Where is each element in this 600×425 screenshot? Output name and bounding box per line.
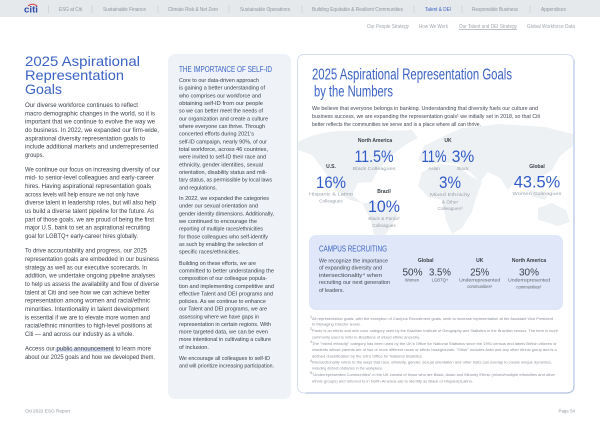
- text block: intro body copy: strategy as well as our executive scorecards. In: [25, 264, 148, 271]
- text block: intro body copy: To drive accountability and progress, our 2025: [25, 248, 148, 255]
- text block: footnotes: "Underrepresented Communities" in the UK consist of those who are Black, Asian and Minority Ethnic (mixed/multiple ethnicities and other: [312, 373, 556, 377]
- stat: Global 43.5%: 43.5%: [514, 174, 561, 192]
- top navigation bar: Appendices: [541, 7, 566, 13]
- text block: campus recruiting description: of expanding diversity and: [319, 266, 382, 272]
- text block: intro body copy: aspirational diversity representation goals to: [25, 135, 146, 142]
- sub navigation: How We Work: [419, 24, 448, 30]
- stat: Global 43.5%: Global: [529, 164, 545, 170]
- stat: campus global: LGBTQ+: [432, 278, 449, 282]
- text block: intro body copy: macro demographic changes in the world, so it is: [25, 110, 155, 117]
- text block: self-ID body copy: where everyone can thrive. Through: [178, 124, 265, 130]
- stat: North America 11.5%: North America: [358, 138, 392, 144]
- heading: 2025 Aspirational Representation Goals: 2025 Aspirational: [25, 53, 140, 69]
- top navigation bar: Building Equitable & Resilient Communities: [312, 7, 403, 13]
- text block: self-ID body copy: were invited to self-ID their race and: [178, 155, 266, 161]
- heading: by the numbers: 2025 Aspirational Representation Goals: [312, 66, 512, 84]
- text block: footnotes: 5: [310, 371, 312, 375]
- heading: by the numbers: [312, 66, 512, 100]
- top navigation bar: Sustainable Finance: [103, 7, 146, 13]
- text block: self-ID body copy: obtaining self-ID from our people: [179, 101, 263, 107]
- text block: self-ID body copy: under our sexual orientation and: [179, 204, 258, 210]
- panel: the importance of self-ID: [168, 54, 291, 399]
- text block: campus recruiting description: [319, 258, 390, 294]
- stat: Global 43.5%: Women Colleagues: [512, 191, 562, 196]
- text block: footnotes: including distinct obstacles in the workplace.: [312, 367, 383, 371]
- text block: self-ID body copy: our organization and create a culture: [179, 116, 268, 122]
- stat: U.S. 16%: U.S.: [326, 164, 336, 170]
- text block: self-ID body copy: and will prioritize increasing participation.: [179, 364, 274, 370]
- text block: self-ID body copy: for those colleagues who self-identify: [179, 234, 268, 240]
- text block: intro body copy: [25, 102, 160, 361]
- text block: self-ID body copy: tion and implementing competitive and: [179, 284, 274, 290]
- text block: intro body copy: part of those goals, we are proud of being the first: [25, 216, 154, 223]
- text block: self-ID body copy: In 2022, we expanded the categories: [179, 196, 269, 202]
- text block: footnotes: The "mixed ethnicity" category has been used by the UK's Office for National Statistics since the 1991 census and labels British citizens or: [312, 342, 558, 346]
- text block: self-ID body copy: ethnicity, gender identities, sexual: [179, 162, 263, 168]
- stat: UK 11% 3% 3%: UK: [444, 138, 452, 144]
- text block: campus recruiting description: of leaders.: [319, 288, 344, 294]
- text block: self-ID body copy: who comprises our workforce and: [178, 93, 261, 99]
- text block: intro body copy: racial/ethnic minorities to high-level positions at: [25, 323, 152, 330]
- stat: Brazil 10%: 10%: [368, 198, 400, 216]
- text block: self-ID body copy: policies. As we continue to enhance: [179, 299, 266, 305]
- text block: intro body copy: diverse talent in leadership roles, but will also help: [25, 200, 157, 207]
- stat: campus North America: 30%: [519, 268, 539, 278]
- top navigation bar: Climate Risk & Net Zero: [168, 7, 218, 13]
- text block: intro body copy: Citi — and across our industry as a whole.: [25, 331, 134, 338]
- stat: UK 11% 3% 3%: & Other: [442, 200, 459, 204]
- text block: self-ID body copy: specific races/ethnicities.: [179, 250, 240, 256]
- text block: self-ID body copy: and regulations.: [179, 185, 217, 191]
- footer: page number: Page 54: [558, 408, 575, 414]
- text block: intro body copy: Access our public announcement to learn more: [25, 346, 152, 353]
- stat: UK 11% 3% 3%: [422, 138, 475, 211]
- text block: footnotes: All representation goals, with the exception of Campus Recruitment goals, seek to increase representation at the Assistant Vice President: [312, 317, 553, 321]
- text block: intro body copy: minorities. Intentionality in talent development: [25, 306, 149, 313]
- stat: UK 11% 3% 3%: Colleagues³: [437, 206, 463, 211]
- text block: self-ID body copy: effective Talent and DEI programs and: [179, 291, 273, 297]
- text block: self-ID body copy: representation in certain regions. With: [179, 322, 271, 328]
- panel: campus recruiting: [309, 235, 563, 310]
- text block: intro body copy: major U.S. bank to set an aspirational recruiting: [25, 225, 151, 232]
- text block: intro body copy: across levels will help ensure we not only have: [25, 191, 139, 198]
- stat: U.S. 16%: 16%: [316, 174, 346, 192]
- stat: campus global: 3.5%: [429, 268, 451, 278]
- sub navigation: Global Workforce Data: [527, 24, 575, 30]
- text block: footnotes: [310, 315, 558, 383]
- stat: U.S. 16%: [309, 164, 353, 204]
- text block: footnotes: 3: [310, 340, 312, 344]
- text block: self-ID body copy: [178, 78, 274, 370]
- text block: self-ID body copy: more targeted data, we can be even: [179, 330, 268, 336]
- text block: intro body copy: hires. Having aspirational representation goals: [25, 183, 151, 190]
- sub navigation: [367, 24, 575, 30]
- stat: Brazil 10%: [368, 189, 400, 228]
- stat: UK 11% 3% 3%: Asian: [428, 166, 440, 171]
- text block: self-ID body copy: is gaining a better understanding of: [179, 86, 265, 92]
- text block: intro to numbers: better reflects the communities we serve and is a place where all can thrive.: [312, 122, 481, 128]
- sub navigation: Our People Strategy: [367, 24, 409, 30]
- text block: intro body copy: important that we continue to evolve the way we: [25, 119, 156, 126]
- stat: Global 43.5%: [512, 164, 562, 196]
- stat: U.S. 16%: Hispanic & Latino: [309, 192, 353, 197]
- text block: footnotes: to Managing Director levels.: [312, 323, 361, 327]
- text block: self-ID body copy: tary status, as permissible by local laws: [179, 178, 272, 184]
- top navigation bar: ESG at Citi: [59, 7, 82, 13]
- stat: campus North America: North America: [512, 258, 546, 264]
- text block: intro body copy: to help us assess the availability and flow of diverse: [25, 281, 160, 288]
- stat: campus UK: UK: [476, 258, 484, 264]
- text block: self-ID body copy: of inclusion.: [179, 345, 209, 351]
- text block: intro to numbers: business success, we are expanding the representation goals¹ we initially set in 2018, so that Citi: [312, 114, 540, 120]
- top navigation bar: [0, 0, 600, 17]
- text block: intro body copy: about our 2025 goals and how we developed them.: [25, 354, 155, 361]
- top navigation bar: Sustainable Operations: [240, 7, 290, 13]
- heading: the importance of self-ID: THE IMPORTANCE OF SELF-ID: [179, 64, 272, 74]
- text block: footnotes: Pardo is an ethnic and skin color category used by the Brazilian Institute of Geography and Statistics in the Brazilian census. The term is more: [312, 329, 558, 333]
- text block: intro body copy: do business. In 2022, we expanded our firm-wide,: [25, 127, 159, 134]
- stat: Brazil 10%: Brazil: [377, 189, 391, 195]
- icon: citi logo: citi: [24, 4, 38, 14]
- stat: Brazil 10%: Black & Pardo²: [368, 216, 400, 221]
- text block: intro body copy: talent at Citi and see how we can achieve better: [25, 289, 150, 296]
- text block: campus recruiting description: We recognize the importance: [319, 258, 388, 264]
- text block: self-ID body copy: our Talent and DEI programs, we are: [179, 307, 267, 313]
- text block: self-ID body copy: orientation, disability status and mili-: [179, 170, 267, 176]
- text block: footnotes: residents whose parents are of two or more different races or ethnic backgrounds. "Other" includes Arab and any other ethnic group and is a: [312, 348, 558, 352]
- world map background: [298, 124, 573, 235]
- text block: intro body copy: addition, we undertake ongoing pipeline analyses: [25, 273, 155, 280]
- text block: footnotes: defined classification by the UK's Office for National Statistics.: [312, 355, 423, 359]
- text block: intro body copy: Our diverse workforce continues to reflect: [25, 102, 138, 109]
- text block: self-ID body copy: reporting of multiple races/ethnicities: [179, 227, 263, 233]
- stat: campus North America: Underrepresented: [508, 278, 551, 282]
- stat: campus global: Global: [418, 258, 434, 264]
- text block: self-ID body copy: We encourage all colleagues to self-ID: [179, 356, 270, 362]
- stat: U.S. 16%: Colleagues: [319, 199, 343, 204]
- heading: 2025 Aspirational Representation Goals: Representation: [25, 67, 124, 83]
- text block: self-ID body copy: Core to our data-driven approach: [179, 78, 259, 84]
- text block: intro body copy: representation goals are embedded in our business: [25, 256, 159, 263]
- text block: self-ID body copy: we continued to encourage the: [178, 219, 257, 225]
- text block: footnotes: 1: [310, 315, 312, 319]
- stat: UK 11% 3% 3%: Mixed Ethnicity: [430, 192, 471, 197]
- stat: campus UK: communities⁵: [467, 284, 493, 289]
- text block: intro to numbers: We believe that everyone belongs in banking. Understanding that diversity fuels our culture and: [312, 106, 538, 112]
- heading: 2025 Aspirational Representation Goals: [25, 53, 140, 97]
- stat: campus UK: [459, 258, 501, 289]
- text block: campus recruiting description: recruiting our next generation: [319, 280, 390, 286]
- text block: self-ID body copy: Building on these efforts, we are: [179, 261, 256, 267]
- text block: intro body copy: mid- to senior-level colleagues and early-career: [25, 175, 154, 182]
- text block: self-ID body copy: concerted efforts during 2021's: [179, 132, 254, 138]
- text block: intro body copy: representation among women and racial/ethnic: [25, 298, 150, 305]
- heading: by the numbers: by the Numbers: [314, 84, 393, 100]
- stat: campus North America: communities⁵: [516, 284, 542, 290]
- text block: self-ID body copy: committed to better understanding the: [179, 268, 274, 274]
- text block: intro to numbers: [312, 106, 540, 128]
- text block: self-ID body copy: as such by enabling the selection of: [179, 242, 263, 248]
- stat: UK 11% 3% 3%: 3%: [439, 174, 461, 192]
- text block: self-ID body copy: total workforce, across 46 countries,: [179, 147, 268, 153]
- text block: self-ID body copy: gender identity dimensions. Additionally,: [179, 211, 274, 217]
- stat: campus global: 50%: [402, 268, 423, 278]
- stat: campus global: [402, 258, 451, 282]
- sub navigation: Our Talent and DEI Strategy: [459, 24, 517, 30]
- text block: footnotes: 2: [310, 327, 312, 331]
- text block: intro body copy: goal for LGBTQ+ early-career hires globally.: [25, 233, 138, 240]
- text block: footnotes: commonly used to refer to Brazilians of mixed ethnic ancestry.: [312, 336, 420, 340]
- text block: intro body copy: groups.: [25, 152, 44, 159]
- text block: intro body copy: We continue our focus on increasing diversity of our: [25, 166, 160, 173]
- text block: intro body copy: us build a diverse talent pipeline for the future. As: [25, 208, 154, 215]
- panel: by the numbers: [298, 54, 574, 393]
- text block: footnotes: 4: [310, 359, 312, 363]
- stat: North America 11.5%: [352, 138, 396, 171]
- text block: self-ID body copy: self-ID campaign, nearly 90%, of our: [179, 139, 267, 145]
- text block: self-ID body copy: so we can better meet the needs of: [179, 109, 263, 115]
- stat: North America 11.5%: 11.5%: [354, 148, 394, 166]
- stat: UK 11% 3% 3%: 11%: [422, 148, 447, 166]
- text block: campus recruiting description: intersectionality⁴ when: [319, 272, 382, 279]
- text block: self-ID body copy: composition of our colleague popula-: [179, 276, 267, 282]
- stat: campus North America: [508, 258, 551, 290]
- text block: self-ID body copy: assessing where we have gaps in: [179, 314, 259, 320]
- stat: campus UK: 25%: [470, 268, 489, 278]
- text block: self-ID body copy: more intentional in cultivating a culture: [179, 337, 271, 343]
- heading: 2025 Aspirational Representation Goals: Goals: [25, 81, 62, 97]
- top navigation bar: Responsible Business: [472, 7, 518, 13]
- top navigation bar: Talent & DEI: [425, 7, 451, 13]
- text block: footnotes: ethnic groups) and referred to in North America are to identify as Black or Hispanic/Latino.: [312, 379, 473, 383]
- text block: footnotes: Intersectionality refers to the ways that race, ethnicity, gender, sexual orientation and other traits can overlap to create unique dynamics,: [312, 361, 552, 365]
- stat: UK 11% 3% 3%: 3%: [452, 148, 475, 166]
- heading: campus recruiting: CAMPUS RECRUITING: [319, 244, 387, 254]
- footer: report name: Citi 2022 ESG Report: [25, 408, 71, 414]
- stat: UK 11% 3% 3%: Black: [457, 166, 469, 171]
- stat: Brazil 10%: Colleagues: [372, 223, 396, 228]
- text block: intro body copy: is essential if we are to elevate more women and: [25, 314, 151, 321]
- stat: North America 11.5%: Black Colleagues: [352, 166, 396, 171]
- text block: intro body copy: include additional markets and underrepresented: [25, 144, 159, 151]
- stat: campus UK: Underrepresented: [459, 278, 501, 282]
- stat: campus global: Women: [405, 278, 420, 282]
